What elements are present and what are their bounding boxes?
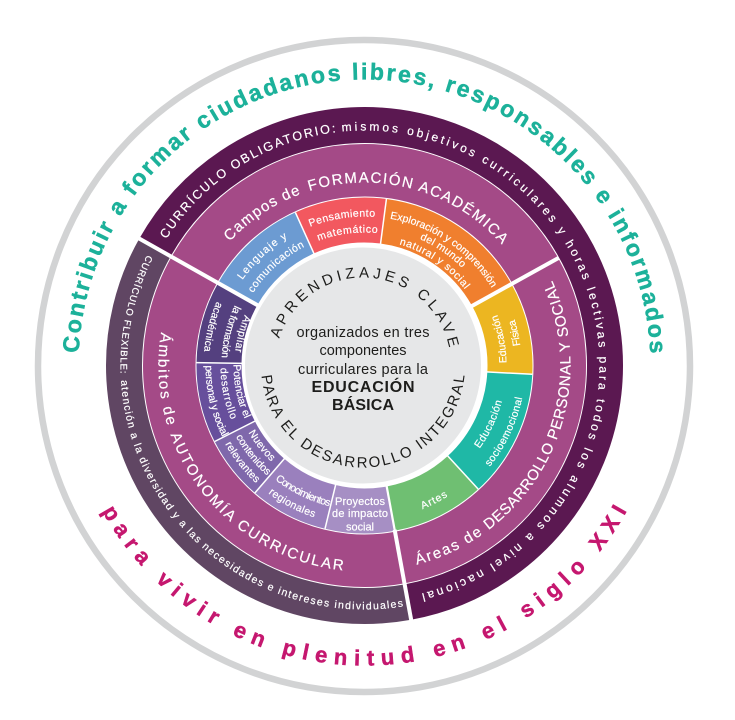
segment: proyectos de impacto social xyxy=(330,496,391,534)
panel: campos de formación académica xyxy=(172,144,558,282)
segment: conocimientos regionales: Conocimientos xyxy=(276,475,330,506)
segment: nuevos contenidos relevantes xyxy=(214,422,284,493)
segment: artes xyxy=(388,456,478,530)
segment: artes: Artes xyxy=(422,492,447,510)
arc label: aprendizajes clave: APRENDIZAJES CLAVE xyxy=(271,267,459,348)
panel: ámbitos de autonomía curricular: AUTONOMÍA CURRICULAR xyxy=(170,434,343,570)
heading: contribuir a formar ciudadanos: Contribuir a formar ciudadanos libres, responsables e informados xyxy=(63,62,664,353)
panel: currículo obligatorio band xyxy=(140,107,623,620)
segment: lenguaje y comunicación: Lenguaje y xyxy=(236,233,286,280)
segment: educación física: Educación xyxy=(492,315,507,362)
segment: exploración y comprensión: natural y social xyxy=(400,239,471,289)
segment: pensamiento matemático: matemático xyxy=(317,224,378,241)
panel: áreas de desarrollo personal y social xyxy=(397,260,586,583)
panel: áreas de desarrollo personal y social: Áreas de xyxy=(416,529,482,565)
segment: educación física: Física xyxy=(510,319,520,346)
segment: lenguaje y comunicación: comunicación xyxy=(249,242,304,292)
panel: ámbitos de autonomía curricular xyxy=(143,258,402,587)
segment: potenciar el desarrollo personal y social: Potenciar el xyxy=(233,365,252,418)
center text block: curriculares para la xyxy=(298,362,429,378)
segment: nuevos contenidos relevantes: contenidos xyxy=(236,435,270,475)
segment: potenciar el desarrollo personal y social: desarrollo xyxy=(220,368,236,419)
segment: conocimientos regionales: regionales xyxy=(268,489,316,517)
segment: educación física xyxy=(473,286,532,374)
center text block: componentes xyxy=(320,343,406,359)
segment: proyectos de impacto social: Proyectos xyxy=(335,496,386,508)
panel: áreas de desarrollo personal y social: DESARROLLO PERSONAL Y SOCIAL xyxy=(482,280,571,530)
segment: exploración y comprensión xyxy=(381,199,510,304)
panel: campos de formación académica: Campos de xyxy=(224,188,300,240)
segment: ampliar la formación académica: la formación xyxy=(222,306,242,358)
segment: nuevos contenidos relevantes: Nuevos xyxy=(248,429,274,461)
segment: educación socioemocional: socioemocional xyxy=(486,396,522,466)
segment: exploración y comprensión: Exploración y comprensión xyxy=(390,212,496,288)
panel: currículo flexible band xyxy=(106,240,410,624)
segment: pensamiento matemático xyxy=(295,198,386,253)
arc label: para el desarrollo integral: PARA EL DESARROLLO INTEGRAL xyxy=(262,375,465,468)
segment: potenciar el desarrollo personal y social xyxy=(196,363,254,442)
center text block xyxy=(296,325,430,414)
segment: pensamiento matemático: Pensamiento xyxy=(308,209,375,227)
segment: proyectos de impacto social: social xyxy=(346,522,374,534)
segment: conocimientos regionales xyxy=(255,459,335,529)
heading: para vivir en plenitud: para vivir en plenitud en el siglo XXI xyxy=(98,504,627,666)
segment: ampliar la formación académica: académica xyxy=(204,302,222,352)
segment: lenguaje y comunicación xyxy=(219,212,314,304)
panel: ámbitos de autonomía curricular: Ámbitos de xyxy=(158,332,176,424)
center text block: BÁSICA xyxy=(332,395,394,414)
segment: ampliar la formación académica: Ampliar xyxy=(235,314,250,352)
panel: currículo flexible band: CURRÍCULO FLEXIBLE: xyxy=(120,256,152,373)
panel: currículo obligatorio band: CURRÍCULO OBLIGATORIO: xyxy=(160,124,335,238)
panel: currículo flexible band: atención a la diversidad y a las necesidades e intereses individuales xyxy=(120,380,403,610)
segment: proyectos de impacto social: de impacto xyxy=(332,508,388,520)
segment: educación socioemocional: Educación xyxy=(474,400,502,448)
segment: potenciar el desarrollo personal y social: personal y social xyxy=(203,366,229,436)
segment: ampliar la formación académica xyxy=(196,284,256,363)
panel: currículo obligatorio band: mismos objetivos curriculares y horas lectivas para todos los alumnos a nivel nacional xyxy=(342,122,606,602)
segment: exploración y comprensión: del mundo xyxy=(420,234,465,267)
segment: educación socioemocional xyxy=(448,372,532,490)
center text block: organizados en tres xyxy=(296,325,430,341)
center text block: EDUCACIÓN xyxy=(312,377,414,396)
center circle xyxy=(245,248,481,484)
segment: nuevos contenidos relevantes: relevantes xyxy=(225,442,259,482)
panel: campos de formación académica: FORMACIÓN ACADÉMICA xyxy=(308,172,507,245)
